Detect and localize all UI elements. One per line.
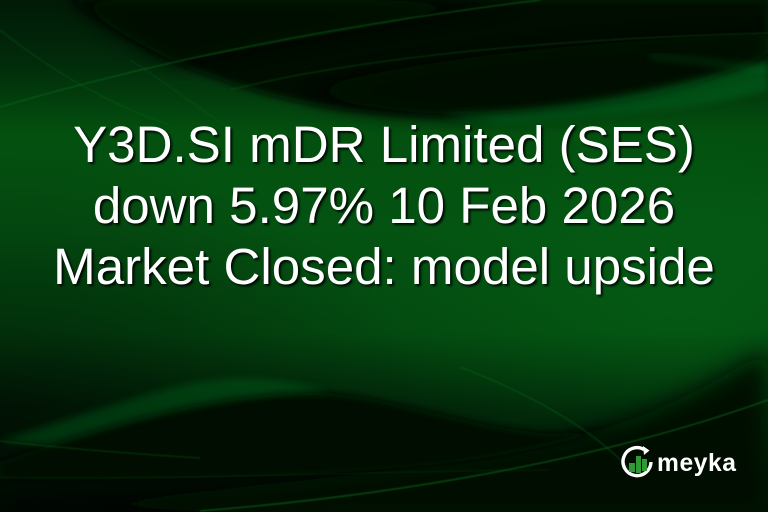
title: down 5.97% 10 Feb 2026 [93, 177, 675, 234]
title [53, 116, 716, 298]
wordmark: meyka [657, 450, 737, 477]
logo: meyka [621, 446, 737, 478]
icon: ring with bars [623, 446, 651, 476]
title: Y3D.SI mDR Limited (SES) [73, 116, 695, 173]
title: Market Closed: model upside [53, 238, 715, 295]
